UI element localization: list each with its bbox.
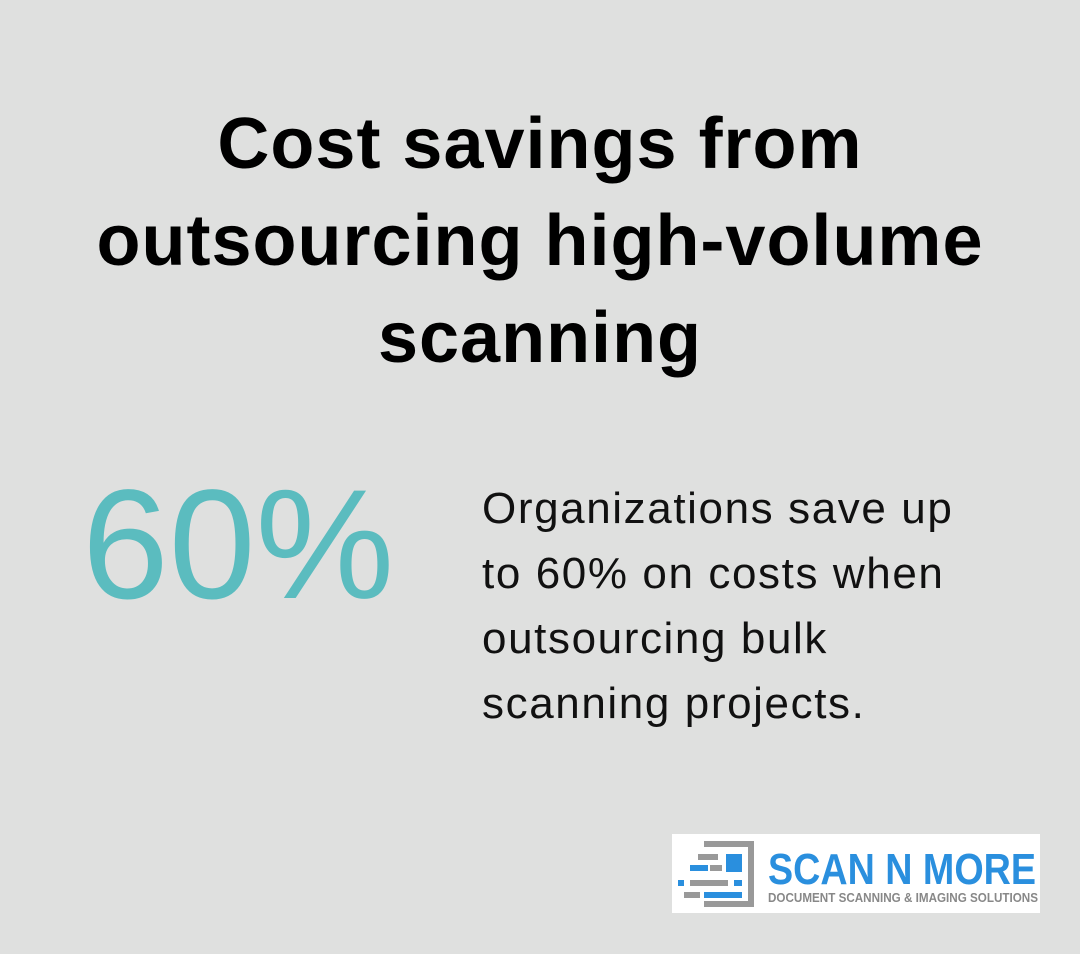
title	[97, 104, 983, 378]
title: scanning	[378, 298, 702, 378]
title: outsourcing high-volume	[97, 201, 983, 281]
description text: Organizations save up	[482, 484, 953, 533]
description text	[482, 484, 953, 728]
icon: scanner	[678, 841, 754, 907]
description text: outsourcing bulk	[482, 614, 828, 663]
description text: to 60% on costs when	[482, 549, 944, 598]
title: Cost savings from	[217, 104, 863, 184]
stat: 60%: 60%	[82, 458, 394, 632]
logo: Scan N More	[672, 834, 1040, 913]
description text: scanning projects.	[482, 679, 865, 728]
